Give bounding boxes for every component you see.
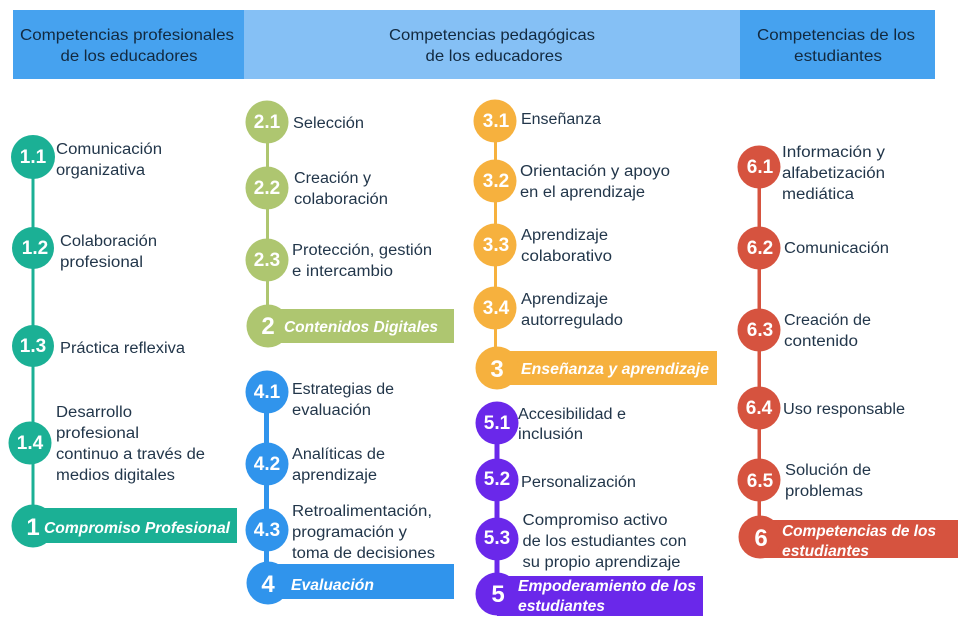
item 6.2: 6.2: [747, 238, 773, 259]
item 4.2: aprendizaje: [292, 467, 377, 484]
item 6.2: Comunicación: [784, 240, 889, 257]
item 6.2: [738, 226, 889, 270]
item 6.5: problemas: [785, 483, 863, 500]
item 6.5: 6.5: [747, 471, 774, 492]
item 1.2: 1.2: [22, 238, 48, 259]
item 6.1: mediática: [782, 186, 854, 203]
item 1.1: [11, 135, 162, 179]
banner 3: 3: [490, 356, 504, 383]
item 5.3: 5.3: [484, 528, 510, 549]
item 2.1: 2.1: [254, 112, 281, 133]
banner 5: 5: [491, 581, 505, 608]
item 1.4: profesional: [56, 425, 139, 442]
item 4.1: Estrategias de: [292, 381, 394, 398]
header: competencias profesionales: [13, 10, 244, 79]
item 6.5: Solución de: [785, 462, 871, 479]
item 3.2: 3.2: [483, 171, 509, 192]
item 4.3: 4.3: [254, 520, 280, 541]
item 5.1: Accesibilidad e: [518, 406, 626, 423]
item 3.3: Aprendizaje: [521, 227, 608, 244]
item 1.4: Desarrollo: [56, 404, 132, 421]
item 1.3: Práctica reflexiva: [60, 340, 185, 357]
header: competencias profesionales: Competencias profesionales: [20, 27, 234, 44]
item 3.4: [474, 286, 623, 330]
item 1.2: [12, 227, 157, 271]
banner 5: estudiantes: [518, 598, 605, 615]
item 1.3: [12, 325, 185, 367]
item 1.4: continuo a través de: [56, 446, 205, 463]
item 6.1: [738, 144, 885, 203]
item 5.2: [476, 458, 636, 502]
item 4.3: programación y: [292, 524, 407, 541]
item 1.4: medios digitales: [56, 467, 175, 484]
item 1.4: [8, 404, 205, 484]
item 2.3: 2.3: [254, 250, 280, 271]
item 3.1: Enseñanza: [521, 111, 601, 128]
panel: competencias de los estudiantes: [738, 144, 958, 560]
item 4.3: toma de decisiones: [292, 545, 435, 562]
item 4.1: [246, 370, 394, 419]
banner 1: 1: [26, 514, 40, 541]
item 6.4: [738, 386, 905, 430]
item 6.3: [738, 308, 871, 352]
item 5.3: [476, 512, 686, 571]
item 5.2: Personalización: [521, 474, 636, 491]
panel: enseñanza y aprendizaje: [474, 100, 717, 390]
header: competencias pedagógicas: de los educadores: [426, 48, 562, 65]
item 2.2: [246, 166, 388, 210]
item 3.3: [474, 224, 612, 266]
item 5.3: de los estudiantes con: [522, 533, 686, 550]
item 6.4: 6.4: [746, 398, 773, 419]
item 4.3: [246, 503, 435, 562]
item 5.1: inclusión: [518, 426, 583, 443]
item 3.3: colaborativo: [521, 248, 612, 265]
banner 4: 4: [261, 571, 275, 598]
item 6.3: 6.3: [747, 320, 773, 341]
item 4.1: 4.1: [254, 382, 281, 403]
item 2.3: Protección, gestión: [292, 242, 432, 259]
banner 6: estudiantes: [782, 543, 869, 560]
banner 4: [246, 562, 454, 604]
header: competencias de los estudiantes: Competencias de los: [757, 27, 915, 44]
item 2.2: colaboración: [294, 191, 388, 208]
item 6.3: contenido: [784, 333, 858, 350]
item 2.2: 2.2: [254, 178, 280, 199]
panel: empoderamiento de los estudiantes: [476, 402, 703, 616]
item 1.4: 1.4: [17, 433, 44, 454]
item 1.1: 1.1: [20, 147, 47, 168]
banner 2: 2: [261, 313, 275, 340]
header: competencias profesionales: de los educadores: [60, 48, 198, 65]
header: competencias de los estudiantes: [740, 10, 935, 79]
item 2.2: Creación y: [294, 170, 371, 187]
panel: contenidos digitales: [246, 100, 454, 348]
item 6.5: [738, 458, 871, 502]
item 3.1: [474, 100, 601, 142]
item 3.1: 3.1: [483, 111, 510, 132]
banner 3: Enseñanza y aprendizaje: [521, 361, 709, 378]
banner 6: Competencias de los: [782, 523, 936, 540]
item 4.2: Analíticas de: [292, 446, 385, 463]
item 5.1: [476, 402, 626, 444]
item 4.1: evaluación: [292, 402, 371, 419]
item 5.3: Compromiso activo: [522, 512, 668, 529]
banner 5: Empoderamiento de los: [518, 578, 696, 595]
item 1.1: organizativa: [56, 162, 145, 179]
item 4.2: [246, 442, 385, 486]
item 1.2: Colaboración: [60, 233, 157, 250]
banner 2: [246, 304, 454, 348]
header: competencias pedagógicas: [244, 10, 740, 79]
item 2.1: [246, 100, 364, 144]
item 6.1: Información y: [782, 144, 885, 161]
item 6.3: Creación de: [784, 312, 871, 329]
item 6.1: alfabetización: [782, 165, 885, 182]
item 5.3: su propio aprendizaje: [522, 554, 680, 571]
banner 5: [476, 572, 703, 616]
banner 4: Evaluación: [291, 577, 374, 594]
item 6.1: 6.1: [747, 157, 774, 178]
banner 2: Contenidos Digitales: [284, 319, 438, 336]
item 4.2: 4.2: [254, 454, 280, 475]
header: competencias de los estudiantes: estudiantes: [794, 48, 882, 65]
item 3.4: 3.4: [483, 298, 510, 319]
panel: evaluación: [246, 370, 454, 604]
item 3.2: en el aprendizaje: [520, 184, 645, 201]
item 2.1: Selección: [293, 115, 364, 132]
panel: compromiso profesional: [8, 135, 237, 548]
banner 1: Compromiso Profesional: [44, 520, 231, 537]
item 3.4: autorregulado: [521, 312, 623, 329]
item 3.4: Aprendizaje: [521, 291, 608, 308]
item 2.3: e intercambio: [292, 263, 393, 280]
item 5.2: 5.2: [484, 469, 510, 490]
item 1.2: profesional: [60, 254, 143, 271]
banner 6: [738, 516, 958, 560]
item 1.3: 1.3: [20, 336, 46, 357]
item 4.3: Retroalimentación,: [292, 503, 432, 520]
item 6.4: Uso responsable: [783, 401, 905, 418]
item 3.2: Orientación y apoyo: [520, 163, 670, 180]
banner 1: [12, 504, 237, 548]
header: competencias pedagógicas: Competencias pedagógicas: [389, 27, 595, 44]
banner 6: 6: [754, 525, 768, 552]
item 1.1: Comunicación: [56, 141, 162, 158]
item 3.2: [474, 160, 670, 202]
item 5.1: 5.1: [484, 413, 511, 434]
banner 3: [476, 346, 717, 390]
item 3.3: 3.3: [483, 235, 509, 256]
item 2.3: [246, 238, 432, 282]
